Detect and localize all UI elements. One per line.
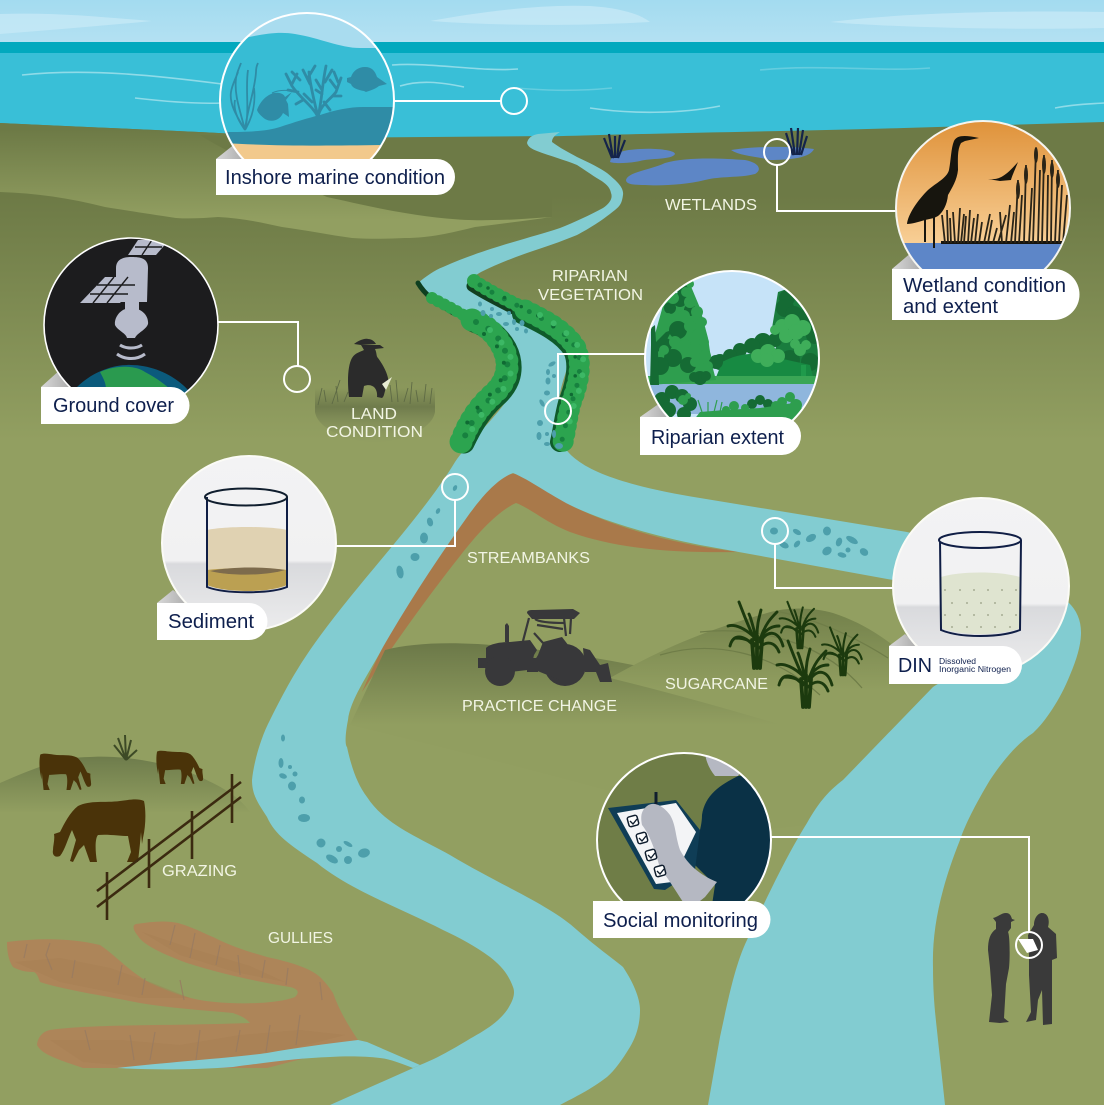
- label: DIN: [889, 646, 1022, 684]
- connector: ground cover: [218, 322, 310, 392]
- grass tuft: [114, 735, 137, 760]
- wetland ponds: [610, 147, 814, 185]
- hill: practice change: [350, 643, 890, 830]
- panel: sediment: [157, 456, 336, 640]
- icon: heron scene: [897, 122, 1069, 269]
- riparian vegetation label: [538, 268, 643, 304]
- label: DIN: DIN: [898, 655, 932, 677]
- panel: social monitoring: [593, 753, 780, 938]
- rocks in rivers: [278, 302, 870, 865]
- connector: social: [771, 837, 1042, 958]
- cows: [39, 751, 203, 862]
- wetlands label: WETLANDS: [665, 197, 757, 214]
- panel: riparian extent: [640, 271, 824, 455]
- label: riparian extent: [640, 417, 801, 455]
- hill: sugarcane: [610, 608, 935, 752]
- label: DIN: Inorganic Nitrogen: [939, 665, 1011, 674]
- label: riparian extent: Riparian extent: [651, 427, 784, 449]
- sugarcane label: SUGARCANE: [665, 676, 768, 693]
- label: ground cover: [41, 387, 190, 424]
- land condition label: LAND: [351, 406, 397, 423]
- label: sediment: [157, 603, 268, 640]
- label: ground cover: Ground cover: [53, 395, 174, 417]
- connector: sediment: [336, 474, 468, 546]
- circle outline: [220, 13, 394, 187]
- icon: DIN beaker: [939, 532, 1021, 636]
- icon: riparian trees: [646, 272, 818, 420]
- connector: riparian: [545, 354, 645, 424]
- connector: DIN: [762, 518, 893, 588]
- grazing label: GRAZING: [162, 863, 237, 880]
- sky: [0, 0, 1104, 44]
- circle outline: [645, 271, 819, 445]
- back dark ridge: [200, 135, 552, 220]
- clouds: [0, 6, 1104, 34]
- land condition label: [326, 406, 423, 441]
- panel: wetland condition: [892, 121, 1080, 320]
- label: inshore marine condition: [216, 159, 455, 195]
- circle outline: [896, 121, 1070, 295]
- land condition label: CONDITION: [326, 424, 423, 441]
- circle background: [893, 498, 1069, 674]
- label: wetland condition and extent: and extent: [903, 296, 998, 318]
- circle outline: [44, 238, 218, 412]
- fence: [97, 774, 241, 920]
- circle outline: [597, 753, 771, 927]
- label: sediment: Sediment: [168, 611, 254, 633]
- icon: satellite: [44, 238, 218, 393]
- land condition figure: [315, 339, 435, 442]
- label: DIN: Dissolved: [939, 657, 976, 666]
- connector: inshore marine: [394, 88, 527, 114]
- label: wetland condition and extent: [892, 269, 1080, 320]
- streambank: [362, 474, 738, 692]
- wetland reeds: [604, 128, 807, 158]
- panel: inshore marine condition: [216, 13, 455, 195]
- practice change label: PRACTICE CHANGE: [462, 698, 617, 715]
- icon: sediment beaker: [205, 488, 287, 592]
- label: inshore marine condition: Inshore marine condition: [225, 167, 445, 189]
- gully stream: [117, 1040, 420, 1069]
- hill: grazing: [0, 757, 250, 812]
- icon: marine scene: [221, 32, 393, 159]
- gullies: [7, 921, 367, 1068]
- riparian vegetation label: VEGETATION: [538, 287, 643, 304]
- streambanks label: STREAMBANKS: [467, 550, 590, 567]
- back hill: [0, 123, 552, 239]
- label: social monitoring: Social monitoring: [603, 910, 758, 932]
- label: wetland condition and extent: Wetland condition: [903, 275, 1066, 297]
- riparian vegetation: right bank: [472, 281, 583, 442]
- panel: ground cover: [41, 238, 218, 424]
- sugarcane plants: [728, 602, 862, 707]
- two farmers: [988, 913, 1057, 1025]
- panel: DIN: [889, 498, 1069, 684]
- connector: wetland: [764, 139, 896, 211]
- sea: [0, 42, 1104, 142]
- riparian vegetation: left bank: [418, 283, 512, 443]
- icon: clipboard survey: [598, 754, 770, 901]
- circle background: [162, 456, 336, 630]
- tablet: [1018, 939, 1038, 953]
- label: social monitoring: [593, 901, 771, 938]
- tractor: [478, 609, 612, 686]
- riparian vegetation label: RIPARIAN: [552, 268, 628, 285]
- gullies label: GULLIES: [268, 930, 333, 947]
- river system: [252, 132, 1081, 1105]
